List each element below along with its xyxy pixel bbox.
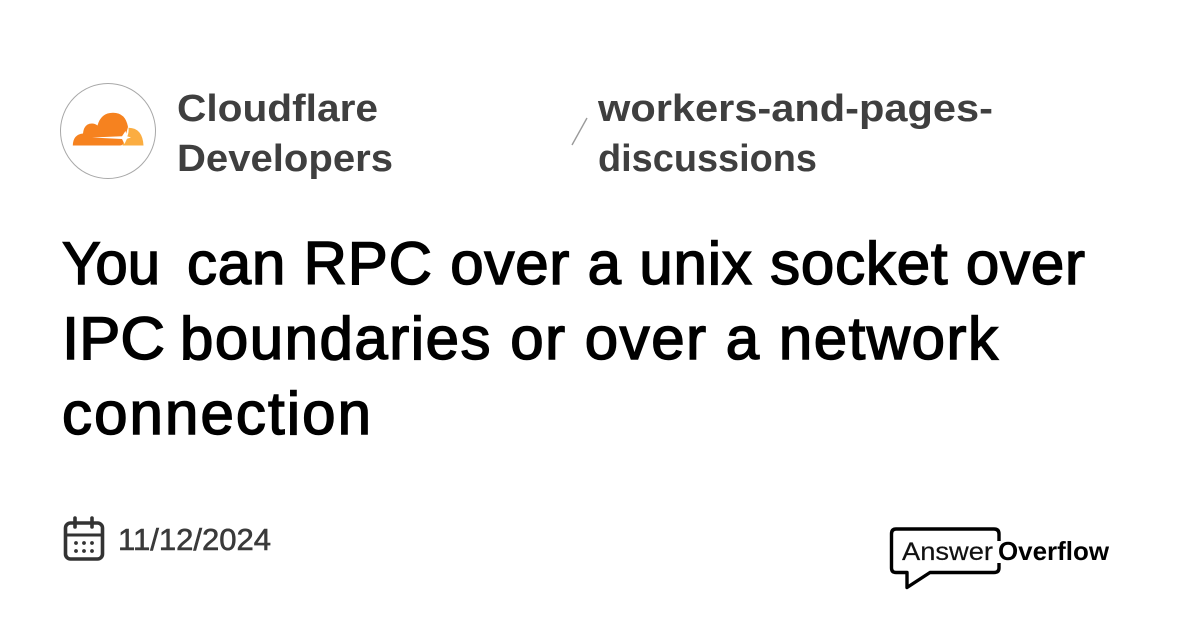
title: can RPC over a unix socket over — [187, 230, 1085, 297]
date: 11/12/2024 — [118, 522, 271, 557]
title: You — [62, 230, 160, 297]
wordmark: Answer: Answer — [902, 538, 993, 566]
heading: server name: Cloudflare — [177, 88, 378, 130]
icon: calendar — [66, 518, 102, 559]
AnswerOverflow logo — [892, 529, 1110, 588]
heading: server name: Developers — [177, 138, 393, 180]
heading: channel name — [597, 88, 993, 180]
heading: channel name: discussions — [598, 138, 817, 180]
icon: speech bubble — [892, 529, 999, 588]
title: IPC — [62, 305, 165, 372]
title: connection — [62, 380, 371, 447]
heading: server name — [177, 88, 393, 180]
heading: channel name: workers-and-pages- — [597, 88, 993, 130]
icon: Cloudflare logo — [60, 84, 156, 178]
title — [62, 230, 1085, 447]
wordmark: Overflow: Overflow — [998, 536, 1110, 566]
slash divider — [572, 118, 587, 145]
title: boundaries or over a network — [180, 305, 999, 372]
